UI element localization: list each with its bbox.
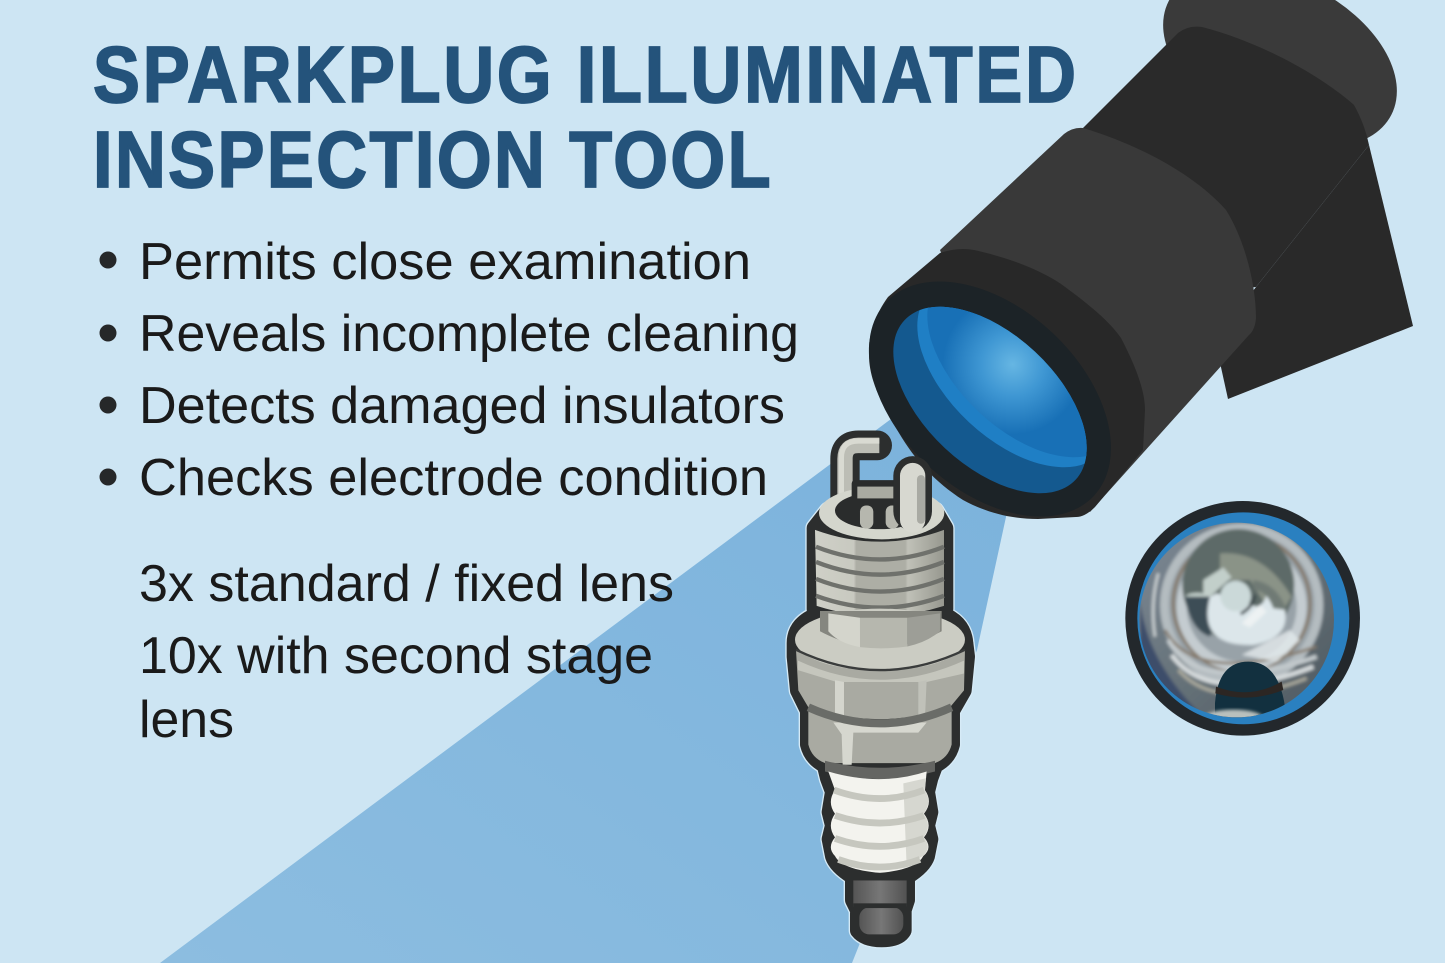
eyepiece	[1133, 0, 1427, 184]
blue lens	[893, 306, 1087, 494]
insulator	[828, 772, 929, 873]
inspection tool	[868, 0, 1413, 519]
plug halo	[795, 511, 967, 939]
middle tube	[940, 128, 1256, 512]
rear tube	[1083, 27, 1369, 300]
magnification text: 3x standard / fixed lens	[139, 555, 674, 613]
blue ring	[1137, 512, 1349, 724]
title	[93, 30, 1076, 204]
title: SPARKPLUG ILLUMINATED	[93, 30, 1076, 119]
plug outline	[795, 511, 967, 939]
side electrode	[913, 476, 921, 520]
hook electrode	[841, 441, 879, 504]
collar	[825, 761, 935, 779]
ceramic tip	[853, 873, 907, 934]
bullet: reveals incomplete cleaning: Reveals incomplete cleaning	[139, 305, 799, 363]
title: INSPECTION TOOL	[93, 115, 771, 204]
bullet list	[100, 233, 799, 507]
lower hex	[808, 707, 952, 765]
inset frame	[1125, 501, 1360, 736]
magnification text: lens	[139, 691, 234, 749]
magnification text: 10x with second stage	[139, 627, 653, 685]
dark reflection	[1206, 662, 1285, 718]
hex neck	[820, 611, 942, 648]
front ring	[869, 249, 1145, 519]
threads	[815, 530, 944, 616]
magnified view inset	[1125, 501, 1360, 736]
bullet: permits close examination: Permits close examination	[139, 233, 751, 291]
rim and cavity	[819, 487, 944, 539]
magnification text	[139, 555, 674, 749]
bullet: detects damaged insulators: Detects damaged insulators	[139, 377, 785, 435]
light beam	[160, 400, 1012, 963]
lens bezel	[824, 236, 1156, 562]
flange	[795, 609, 965, 719]
magnified plug photo	[1139, 522, 1334, 718]
mounting bracket	[1215, 145, 1413, 399]
spark plug	[795, 441, 967, 939]
bullet: checks electrode condition: Checks electrode condition	[139, 449, 768, 507]
center pegs	[860, 506, 899, 528]
